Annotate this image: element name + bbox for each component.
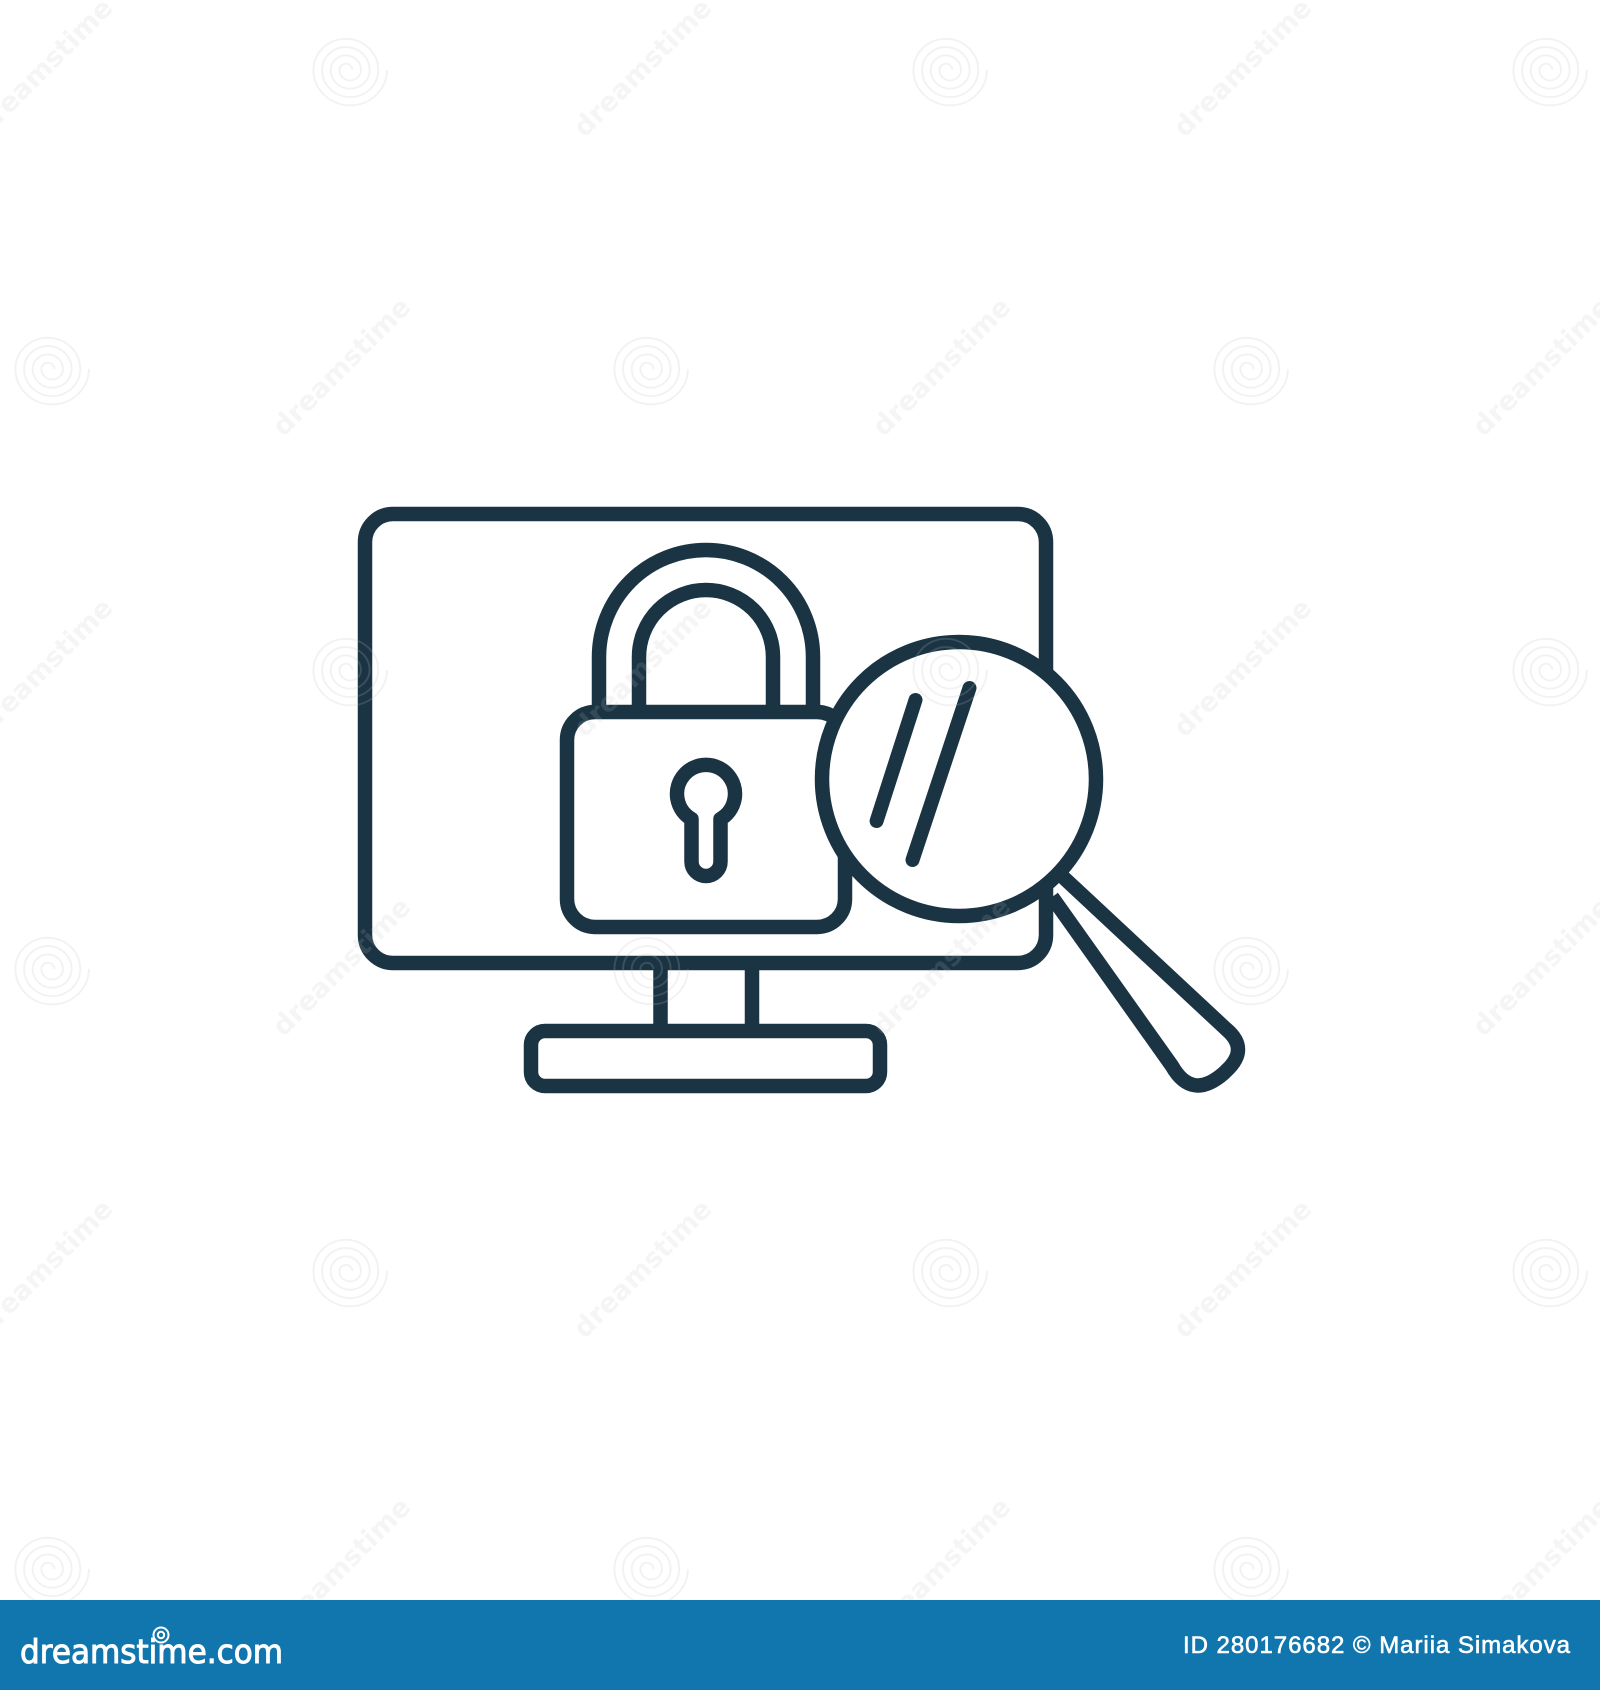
padlock keyhole [677,765,735,876]
padlock body [567,712,845,927]
icon: monitor with padlock and magnifying glass [365,514,1238,1086]
monitor screen [365,514,1046,963]
watermark pattern: dreamstime [867,1492,1017,1642]
image id and credit: ID 280176682 © Mariia Simakova [1183,1632,1571,1659]
watermark pattern: dreamstime [267,1492,417,1642]
monitor base [531,1031,880,1086]
magnifier handle [1052,877,1238,1085]
monitor neck [660,968,752,1030]
watermark pattern: dreamstime [568,593,718,743]
watermark pattern: dreamstime [1168,1194,1318,1344]
padlock shackle [599,550,813,712]
lens glare lines [877,688,970,860]
watermark pattern: dreamstime [867,892,1017,1042]
watermark pattern: dreamstime [867,292,1017,442]
footer band [0,1600,1600,1690]
watermark pattern: dreamstime [267,292,417,442]
watermark pattern: dreamstime [267,892,417,1042]
magnifier lens [822,642,1096,916]
footer logo text: dreamstime.com [20,1632,283,1671]
watermark pattern: dreamstime [1168,593,1318,743]
watermark pattern: dreamstime [568,1194,718,1344]
icon: footer logo spiral [154,1628,168,1642]
